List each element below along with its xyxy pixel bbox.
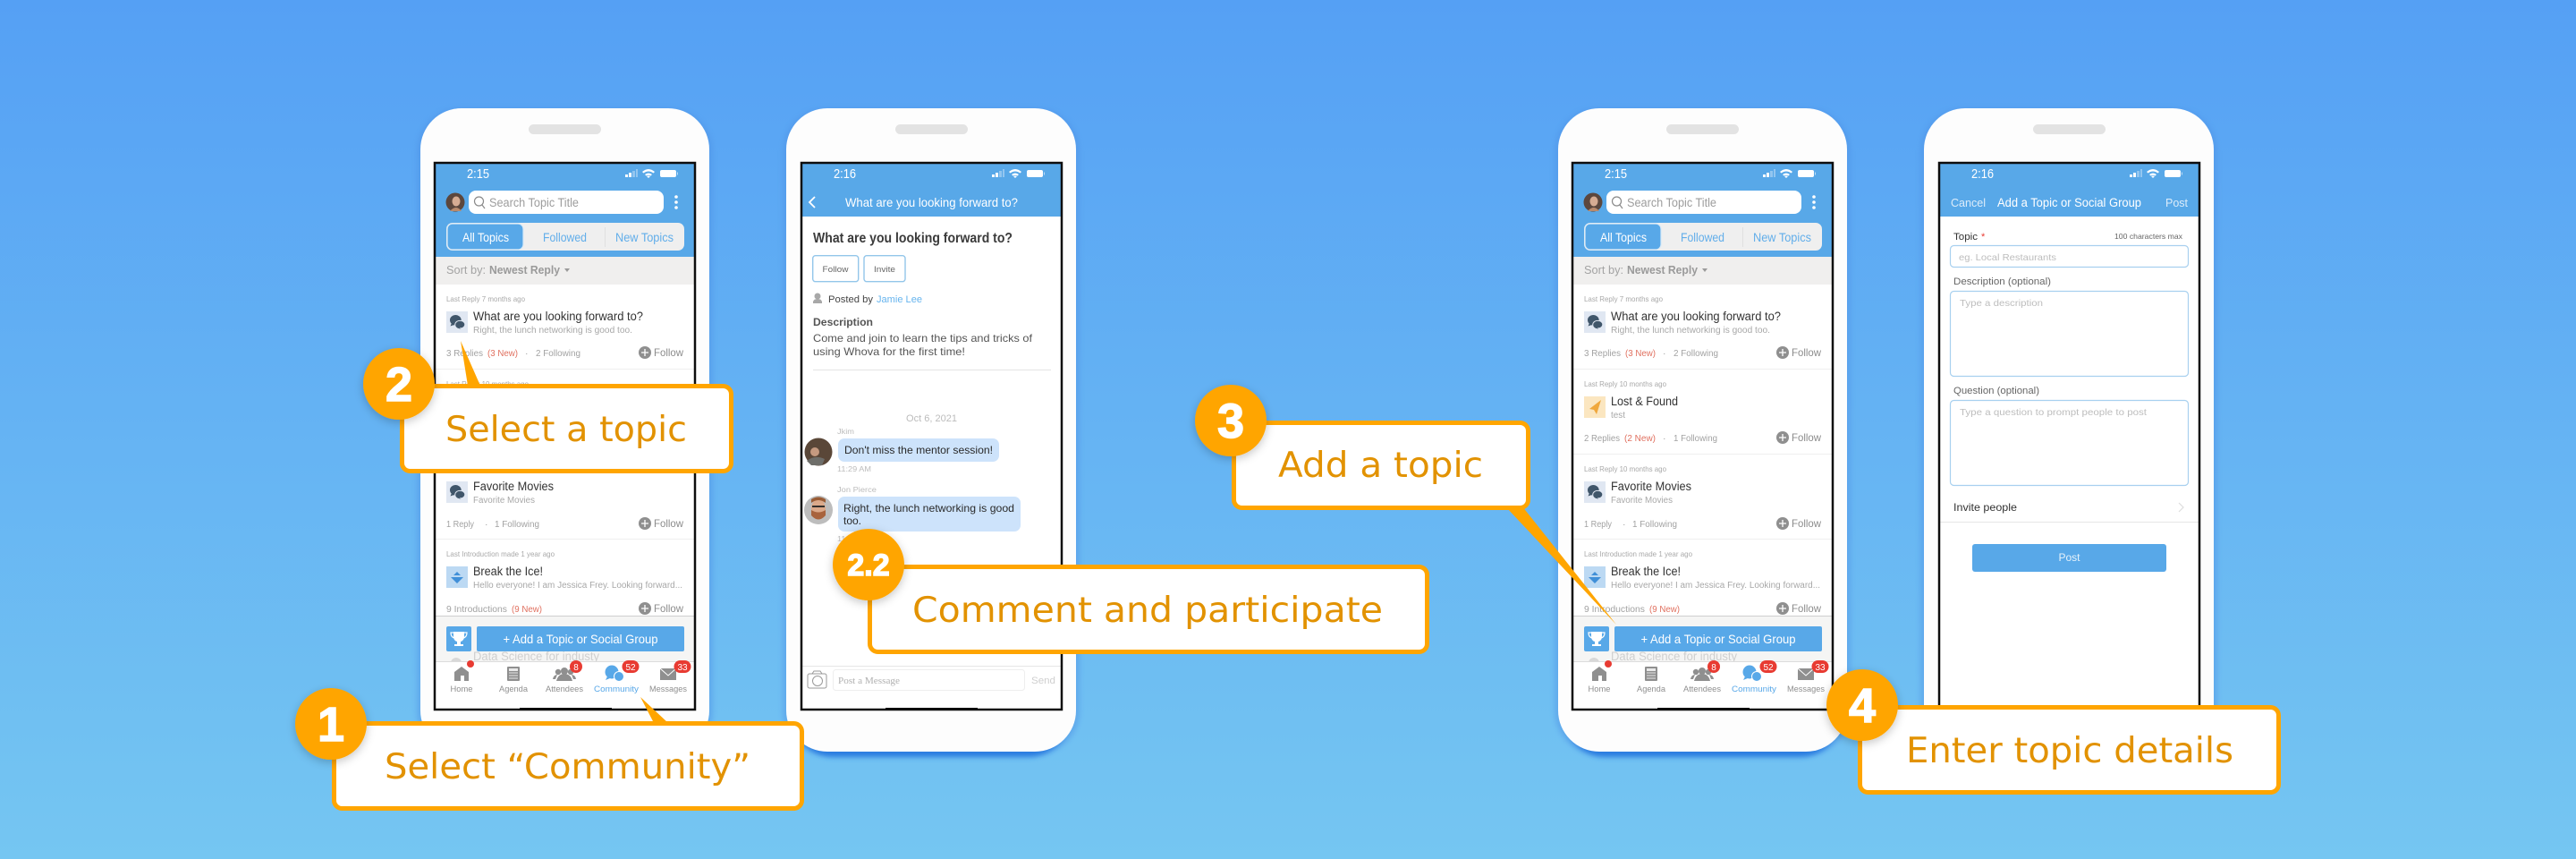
arrow to community tab bbox=[640, 697, 668, 723]
topic row: Favorite Movies: Last Reply 10 months ago bbox=[446, 464, 529, 473]
topic row: Favorite Movies: Follow bbox=[654, 517, 683, 530]
step number 3: 3 bbox=[1217, 395, 1244, 448]
tab: messages: 33 bbox=[677, 663, 688, 673]
topic row: What are you looking forward to?: (3 New) bbox=[1625, 348, 1656, 359]
add-topic panel: Data Science for industy bbox=[473, 650, 599, 663]
app header: 2:16 bbox=[1971, 166, 1994, 182]
add topic button: + Add a Topic or Social Group bbox=[503, 632, 658, 646]
topic row: Break the Ice!: Follow bbox=[1792, 602, 1821, 615]
tab: attendees bbox=[546, 660, 583, 694]
tab: community bbox=[594, 660, 639, 694]
topic field bbox=[1950, 232, 2188, 267]
topic row: Favorite Movies: Favorite Movies bbox=[1611, 496, 1673, 506]
tab: home: Home bbox=[451, 685, 472, 694]
topic field: * bbox=[1981, 232, 1986, 242]
topic row: What are you looking forward to?: Last Reply 7 months ago bbox=[1584, 294, 1663, 303]
topic row: What are you looking forward to?: 2 Following bbox=[536, 348, 580, 359]
app header: Cancel bbox=[1951, 196, 1986, 209]
tab: agenda bbox=[499, 667, 529, 694]
callout box bbox=[869, 567, 1428, 651]
speaker bbox=[1666, 124, 1739, 134]
step number 2.2: 2.2 bbox=[847, 549, 890, 583]
topic row: What are you looking forward to?: 3 Replies bbox=[446, 348, 483, 359]
topic row: Lost & Found bbox=[1572, 379, 1833, 455]
topic row: Favorite Movies: 1 Following bbox=[1632, 519, 1677, 530]
callout 3: Add a topic bbox=[1195, 385, 1616, 625]
topic row: Lost & Found bbox=[435, 379, 695, 455]
topic row: Favorite Movies: · bbox=[1623, 519, 1626, 530]
posted by bbox=[813, 293, 922, 305]
topic row: Lost & Found: 2 Replies bbox=[1584, 433, 1620, 444]
description field bbox=[1950, 276, 2188, 376]
app header: Search Topic Title bbox=[1627, 196, 1716, 209]
bottom tab bar bbox=[435, 660, 695, 710]
invite button bbox=[864, 256, 905, 282]
sort bar: Sort by: bbox=[446, 263, 486, 276]
description bbox=[813, 316, 1033, 358]
callout 2.2: Comment and participate bbox=[833, 529, 1428, 651]
topic row: Lost & Found: · bbox=[525, 433, 528, 444]
phone 4: add topic form bbox=[1920, 108, 2217, 757]
topic field: 100 characters max bbox=[2114, 232, 2183, 241]
topic row: Break the Ice!: Break the Ice! bbox=[1611, 565, 1681, 578]
tab: community: 52 bbox=[625, 663, 636, 673]
invite button: Invite bbox=[874, 265, 895, 275]
post button: Post bbox=[2059, 553, 2080, 564]
topic heading: What are you looking forward to? bbox=[813, 231, 1013, 246]
tab: home bbox=[451, 660, 474, 694]
app header: New Topics bbox=[1753, 231, 1811, 244]
topic row: What are you looking forward to?: Right, the lunch networking is good too. bbox=[1611, 326, 1770, 336]
tabs: All Topics bbox=[462, 231, 509, 244]
arrow to first topic bbox=[461, 341, 480, 386]
app header bbox=[801, 163, 1062, 217]
message: Jkim: 11:29 AM bbox=[837, 464, 871, 473]
topic row: Break the Ice!: (9 New) bbox=[1649, 604, 1680, 615]
speaker bbox=[529, 124, 601, 134]
step number 1 bbox=[295, 688, 367, 760]
user avatar bbox=[445, 193, 465, 211]
step number 4 bbox=[1826, 669, 1898, 741]
phone 3: topic list with add button bbox=[1555, 108, 1851, 757]
sort bar: Sort by: bbox=[1584, 263, 1623, 276]
tab: agenda: Agenda bbox=[499, 685, 529, 694]
follow button bbox=[813, 256, 859, 282]
sort bar: Newest Reply bbox=[489, 263, 561, 276]
phone 2: topic detail and chat bbox=[783, 108, 1080, 757]
description: Come and join to learn the tips and tricks of bbox=[813, 332, 1033, 344]
message: Jon Pierce: too. bbox=[843, 515, 861, 527]
tab: messages: Messages bbox=[649, 685, 687, 694]
bottom tab bar: Attendees bbox=[1683, 685, 1721, 694]
topic row: Lost & Found: Lost & Found bbox=[1611, 395, 1678, 408]
add-topic panel: Data Science for industy bbox=[1611, 650, 1737, 663]
invite people row bbox=[1939, 501, 2199, 523]
message: Jkim: Don't miss the mentor session! bbox=[844, 444, 993, 456]
sort bar bbox=[435, 257, 695, 285]
question field: Question (optional) bbox=[1953, 386, 2039, 396]
callout text: Select a topic bbox=[445, 410, 687, 450]
callout 4: Enter topic details bbox=[1826, 669, 2279, 793]
topic row: Lost & Found: · bbox=[1663, 433, 1665, 444]
message input: Post a Message bbox=[838, 676, 900, 686]
posted by: Jamie Lee bbox=[877, 294, 922, 305]
tabs: New Topics bbox=[615, 231, 674, 244]
bottom tab bar: Community bbox=[1732, 685, 1776, 694]
topic row: What are you looking forward to?: Follow bbox=[654, 346, 683, 359]
status icons bbox=[625, 169, 678, 178]
description: using Whova for the first time! bbox=[813, 345, 965, 358]
app header: Post bbox=[2165, 196, 2188, 209]
app header: 2:15 bbox=[1605, 166, 1627, 182]
callout text: Add a topic bbox=[1278, 446, 1483, 486]
app header: Add a Topic or Social Group bbox=[1997, 196, 2141, 209]
bottom tab bar: 33 bbox=[1815, 663, 1826, 673]
topic row: Break the Ice!: (9 New) bbox=[512, 604, 542, 615]
topic row: Break the Ice!: 9 Introductions bbox=[1584, 604, 1645, 615]
callout 2: Select a topic bbox=[363, 341, 732, 471]
status time: 2:15 bbox=[467, 166, 489, 182]
topic row: What are you looking forward to?: Last Reply 7 months ago bbox=[446, 294, 525, 303]
callout text: Comment and participate bbox=[912, 591, 1383, 631]
step number 2.2 bbox=[833, 529, 904, 600]
question field: Type a question to prompt people to post bbox=[1960, 407, 2147, 418]
tabs: Followed bbox=[543, 231, 587, 244]
topic row: Lost & Found: 2 Replies bbox=[446, 433, 482, 444]
topic row: What are you looking forward to?: 3 Replies bbox=[1584, 348, 1621, 359]
add topic button bbox=[477, 626, 684, 651]
topic row: Favorite Movies: Favorite Movies bbox=[473, 496, 535, 506]
topic row: Favorite Movies: Favorite Movies bbox=[1611, 480, 1691, 493]
topic field: eg. Local Restaurants bbox=[1959, 252, 2056, 263]
screen: community list bbox=[434, 162, 696, 710]
bottom tab bar: Home bbox=[1589, 685, 1610, 694]
topic row: Lost & Found: 1 Following bbox=[1674, 433, 1717, 444]
topic row: What are you looking forward to?: Right, the lunch networking is good too. bbox=[473, 326, 632, 336]
topic row: Break the Ice!: Last Introduction made 1 year ago bbox=[1584, 549, 1692, 558]
app header: All Topics bbox=[1600, 231, 1647, 244]
topic row: Lost & Found: Follow bbox=[654, 431, 683, 444]
topic row: Lost & Found: Last Reply 10 months ago bbox=[1584, 379, 1666, 388]
topic row: Break the Ice!: Break the Ice! bbox=[473, 565, 543, 578]
topic row: Lost & Found: Follow bbox=[1792, 431, 1821, 444]
topic row: Lost & Found: (2 New) bbox=[1624, 433, 1656, 444]
step number 4: 4 bbox=[1849, 679, 1876, 733]
step number 2 bbox=[363, 348, 435, 420]
description: Description bbox=[813, 316, 873, 328]
topic row: What are you looking forward to? bbox=[435, 294, 695, 370]
topic row: Favorite Movies: Follow bbox=[1792, 517, 1821, 530]
sort bar bbox=[1572, 257, 1833, 285]
topic row: Favorite Movies: · bbox=[485, 519, 488, 530]
posted by: Posted by bbox=[828, 294, 874, 305]
callout text: Enter topic details bbox=[1906, 731, 2233, 771]
bottom tab bar: 8 bbox=[1711, 663, 1716, 673]
topic row: Break the Ice!: Hello everyone! I am Jessica Frey. Looking forward... bbox=[1611, 581, 1820, 591]
add-topic panel bbox=[1572, 616, 1833, 668]
invite people row: Invite people bbox=[1953, 501, 2017, 514]
message input: Send bbox=[1031, 676, 1055, 686]
topic row: What are you looking forward to?: What are you looking forward to? bbox=[473, 310, 643, 323]
arrow to add button bbox=[1507, 506, 1616, 625]
topic row: Break the Ice!: 9 Introductions bbox=[446, 604, 507, 615]
description field: Type a description bbox=[1960, 298, 2043, 309]
topic row: Break the Ice! bbox=[1584, 549, 1821, 615]
tab: attendees: 8 bbox=[573, 663, 579, 673]
topic row: Lost & Found: test bbox=[1611, 411, 1625, 421]
chat date: Oct 6, 2021 bbox=[906, 413, 957, 424]
speaker bbox=[2033, 124, 2106, 134]
callout text: Select “Community” bbox=[385, 747, 750, 787]
topic row: Break the Ice!: Last Introduction made 1 year ago bbox=[446, 549, 555, 558]
description field: Description (optional) bbox=[1953, 276, 2051, 287]
topic row: Break the Ice! bbox=[446, 549, 683, 615]
step number 2: 2 bbox=[386, 358, 412, 412]
topic row: What are you looking forward to?: What are you looking forward to? bbox=[1611, 310, 1781, 323]
topic row: Lost & Found: Last Reply 10 months ago bbox=[446, 379, 529, 388]
topic row: Favorite Movies: 1 Reply bbox=[446, 519, 475, 530]
bottom tab bar: 52 bbox=[1763, 663, 1774, 673]
topic row: What are you looking forward to?: 2 Following bbox=[1674, 348, 1718, 359]
tab: messages bbox=[649, 660, 691, 694]
search box bbox=[469, 191, 664, 214]
screen: community list bbox=[1572, 162, 1834, 710]
topic row: Lost & Found: 1 Following bbox=[536, 433, 580, 444]
topic row: Break the Ice!: Hello everyone! I am Jessica Frey. Looking forward... bbox=[473, 581, 682, 591]
tab: attendees: Attendees bbox=[546, 685, 583, 694]
app header bbox=[1939, 163, 2199, 217]
speaker bbox=[895, 124, 968, 134]
app header: Followed bbox=[1681, 231, 1724, 244]
topic row: Favorite Movies: Last Reply 10 months ago bbox=[1584, 464, 1666, 473]
message: Jkim: Jkim bbox=[837, 427, 854, 436]
topic row: Favorite Movies bbox=[1572, 464, 1833, 540]
callout 1: Select Community bbox=[295, 688, 801, 809]
topic row: Lost & Found: Lost & Found bbox=[473, 395, 540, 408]
trophy button bbox=[446, 626, 471, 651]
add-topic panel: + Add a Topic or Social Group bbox=[1640, 632, 1796, 646]
topic row: Favorite Movies: 1 Following bbox=[495, 519, 539, 530]
message: Jon Pierce bbox=[804, 485, 1021, 543]
topic row: Lost & Found: (2 New) bbox=[487, 433, 518, 444]
topic row: Break the Ice!: Follow bbox=[654, 602, 683, 615]
bottom tab bar: Agenda bbox=[1637, 685, 1666, 694]
screen: add topic form bbox=[1938, 162, 2200, 710]
topic row: Favorite Movies: Favorite Movies bbox=[473, 480, 554, 493]
tabs bbox=[446, 223, 684, 251]
follow button: Follow bbox=[823, 265, 849, 275]
topic row: What are you looking forward to?: Follow bbox=[1792, 346, 1821, 359]
post button bbox=[1972, 544, 2166, 572]
topic row: What are you looking forward to?: · bbox=[525, 348, 528, 359]
message: Jkim bbox=[805, 427, 999, 473]
step number 1: 1 bbox=[318, 698, 344, 752]
phone 1: topic list bbox=[417, 108, 713, 757]
callout box bbox=[335, 723, 801, 809]
step number 3 bbox=[1195, 385, 1267, 456]
callout box bbox=[1234, 422, 1528, 508]
topic field: Topic bbox=[1953, 232, 1979, 242]
bottom tab bar: Messages bbox=[1787, 685, 1825, 694]
app header: 2:16 bbox=[834, 166, 856, 182]
app header bbox=[1572, 163, 1833, 257]
message: Jon Pierce: 11:29 AM bbox=[837, 534, 871, 543]
topic row: Lost & Found: test bbox=[473, 411, 487, 421]
message input bbox=[801, 666, 1062, 691]
topic row: What are you looking forward to?: · bbox=[1663, 348, 1665, 359]
tab: community: Community bbox=[594, 685, 639, 694]
add-topic panel bbox=[435, 616, 695, 668]
bottom tab bar bbox=[1572, 660, 1833, 710]
sort bar: Newest Reply bbox=[1627, 263, 1699, 276]
screen: topic detail bbox=[801, 162, 1063, 710]
topic row: What are you looking forward to?: (3 New) bbox=[487, 348, 518, 359]
topic row: Favorite Movies: 1 Reply bbox=[1584, 519, 1613, 530]
callout box bbox=[402, 387, 732, 471]
callout box bbox=[1860, 707, 2279, 793]
topic row: Favorite Movies bbox=[435, 464, 695, 540]
topic row: What are you looking forward to? bbox=[1572, 294, 1833, 370]
message: Jon Pierce: Right, the lunch networking is good bbox=[843, 502, 1014, 515]
search box: Search Topic Title bbox=[489, 196, 579, 209]
question field bbox=[1950, 386, 2188, 485]
app header: What are you looking forward to? bbox=[845, 195, 1018, 209]
menu dots bbox=[674, 195, 678, 209]
message: Jon Pierce: Jon Pierce bbox=[837, 485, 877, 494]
app header bbox=[435, 163, 695, 257]
